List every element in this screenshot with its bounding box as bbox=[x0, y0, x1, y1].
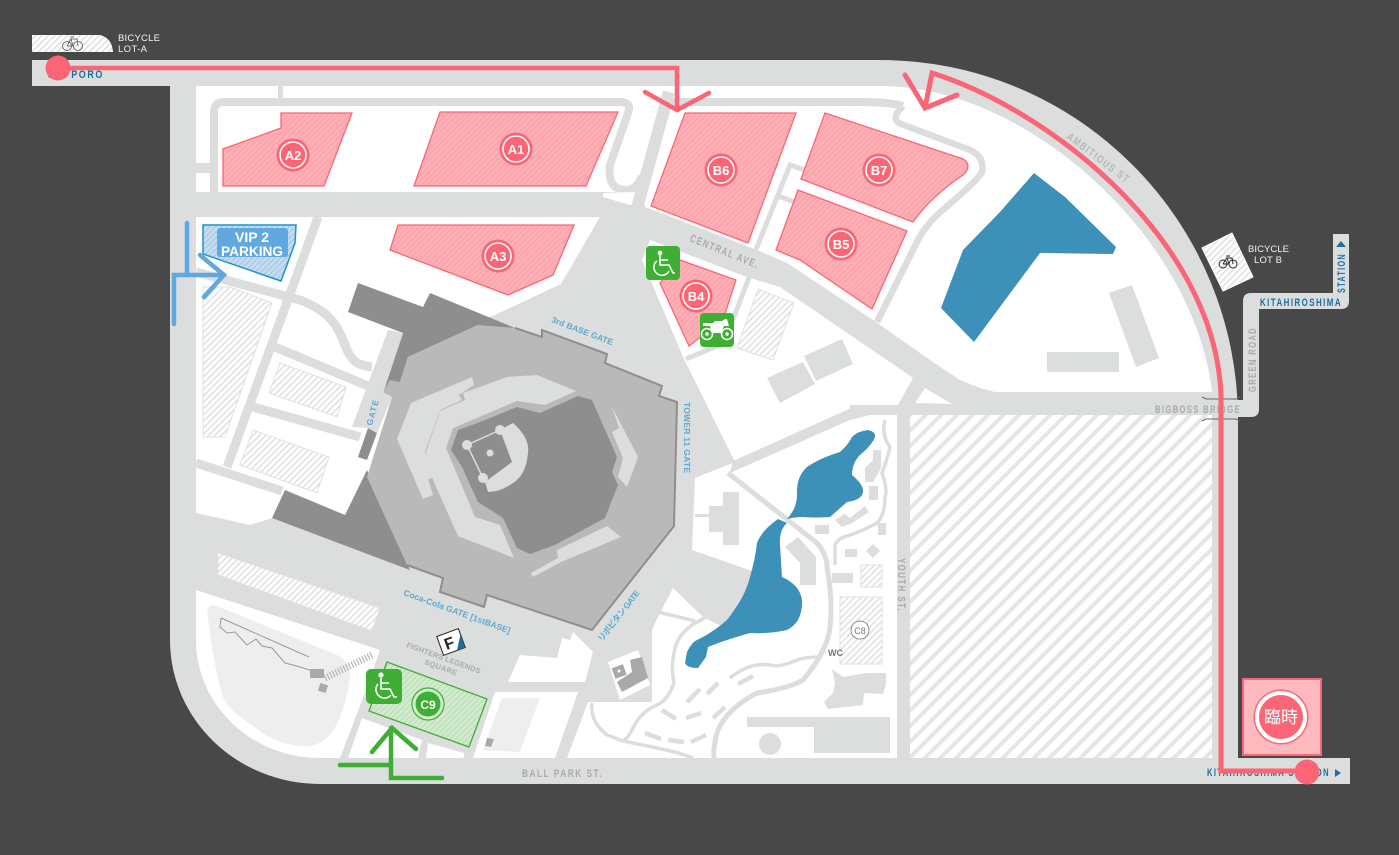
gate names: リポビタン GATE bbox=[596, 588, 642, 643]
pond north bbox=[941, 173, 1116, 342]
left stand bbox=[397, 377, 474, 499]
road names: AMBITIOUS ST bbox=[1064, 131, 1132, 186]
white pad inner bbox=[483, 698, 540, 752]
water bbox=[685, 173, 1116, 668]
infield bbox=[485, 423, 528, 492]
road names: YOUTH ST. bbox=[895, 558, 907, 612]
C8 label bbox=[851, 621, 869, 639]
bicycle lot B: LOT B bbox=[1254, 255, 1282, 266]
fighters legends square label: SQUARE bbox=[423, 657, 458, 678]
road names bbox=[48, 69, 1348, 780]
green road branch bbox=[1236, 234, 1349, 417]
bicycle lot B: BICYCLE bbox=[1248, 244, 1289, 255]
white lots on the plaza bbox=[348, 192, 652, 758]
lot C9 bbox=[369, 662, 487, 747]
road names: BALL PARK ST. bbox=[522, 768, 603, 780]
lots B7: B7 bbox=[871, 163, 887, 178]
lots A1 bbox=[414, 112, 618, 186]
lots B6 bbox=[651, 113, 796, 243]
gate names: TOWER 11 GATE bbox=[682, 402, 692, 473]
temporary lot badge: 臨時 bbox=[1264, 708, 1298, 727]
right stand bbox=[612, 407, 638, 487]
VIP 2 parking: VIP 2 bbox=[235, 229, 269, 245]
outer road ring bbox=[32, 60, 1350, 784]
C8 label: C8 bbox=[854, 626, 866, 636]
lots A3 bbox=[390, 225, 574, 295]
road names: CENTRAL AVE. bbox=[688, 233, 761, 272]
stadium plaza bbox=[196, 197, 755, 758]
gate names: Coca-Cola GATE [1stBASE] bbox=[402, 587, 512, 636]
blue arrow bbox=[174, 223, 224, 324]
VIP 2 parking bbox=[203, 225, 296, 281]
road names: STATION bbox=[1336, 253, 1348, 293]
park interior bbox=[196, 86, 1212, 758]
buildings bbox=[695, 285, 1159, 755]
icon: logo F bbox=[437, 629, 465, 655]
bicycle lot A: BICYCLE bbox=[118, 33, 160, 44]
gate names: 3rd BASE GATE bbox=[550, 315, 615, 347]
icon: wheelchair C9 bbox=[366, 669, 402, 704]
road names: SAPPORO bbox=[48, 69, 104, 81]
road names: BIGBOSS BRIDGE bbox=[1155, 404, 1241, 416]
small rect in pad bbox=[485, 738, 494, 747]
fighters legends square label: FIGHTERS LEGENDS bbox=[405, 640, 482, 676]
VIP 2 parking: PARKING bbox=[221, 243, 283, 259]
lots B4: B4 bbox=[688, 289, 705, 304]
road names: KITAHIROSHIMA bbox=[1260, 297, 1342, 309]
park paths bbox=[592, 420, 890, 758]
pond lower bbox=[685, 519, 802, 668]
temporary lot badge bbox=[1243, 679, 1321, 755]
lots A2: A2 bbox=[285, 148, 301, 163]
icon: wheelchair B4 bbox=[646, 246, 680, 280]
stadium outbuildings bbox=[348, 283, 515, 393]
WC label: WC bbox=[828, 648, 843, 658]
hatched lots bbox=[203, 287, 882, 664]
stadium road to gate bbox=[352, 330, 403, 433]
bicycle lot A: LOT-A bbox=[118, 44, 148, 55]
icon: motorcycle bbox=[700, 313, 734, 347]
lots A3: A3 bbox=[490, 249, 506, 264]
garden dashes bbox=[645, 676, 753, 742]
lawn bbox=[207, 606, 372, 746]
road network bbox=[196, 86, 1212, 758]
stadium body bbox=[367, 325, 677, 630]
green arrow bbox=[340, 728, 442, 778]
lots A2 bbox=[223, 113, 352, 186]
field bbox=[451, 396, 618, 554]
icon: logo F: F bbox=[442, 634, 457, 654]
bicycle lot B bbox=[1202, 233, 1289, 291]
small baseball field bbox=[608, 650, 650, 700]
pink route from Sapporo bbox=[46, 56, 709, 110]
lots B4 bbox=[660, 260, 736, 346]
bicycle lot A bbox=[32, 33, 160, 55]
lots A1: A1 bbox=[508, 142, 524, 157]
stadium bbox=[272, 283, 677, 630]
bridge marks bbox=[1202, 397, 1240, 421]
lots B7 bbox=[801, 113, 968, 222]
gate names bbox=[364, 315, 692, 643]
lot C9: C9 bbox=[420, 698, 436, 712]
gate names: GATE bbox=[364, 398, 381, 427]
lots B5 bbox=[776, 190, 907, 309]
pond upper bbox=[787, 430, 875, 519]
bottom stand bbox=[531, 526, 621, 577]
lots B5: B5 bbox=[833, 237, 849, 252]
road names: KITAHIROSHIMA STATION bbox=[1207, 767, 1330, 779]
lots B6: B6 bbox=[713, 163, 729, 178]
hatched big lot bbox=[910, 415, 1212, 758]
pink route from station bbox=[905, 73, 1320, 784]
road names: GREEN ROAD bbox=[1247, 327, 1259, 392]
main stand bbox=[426, 375, 576, 558]
